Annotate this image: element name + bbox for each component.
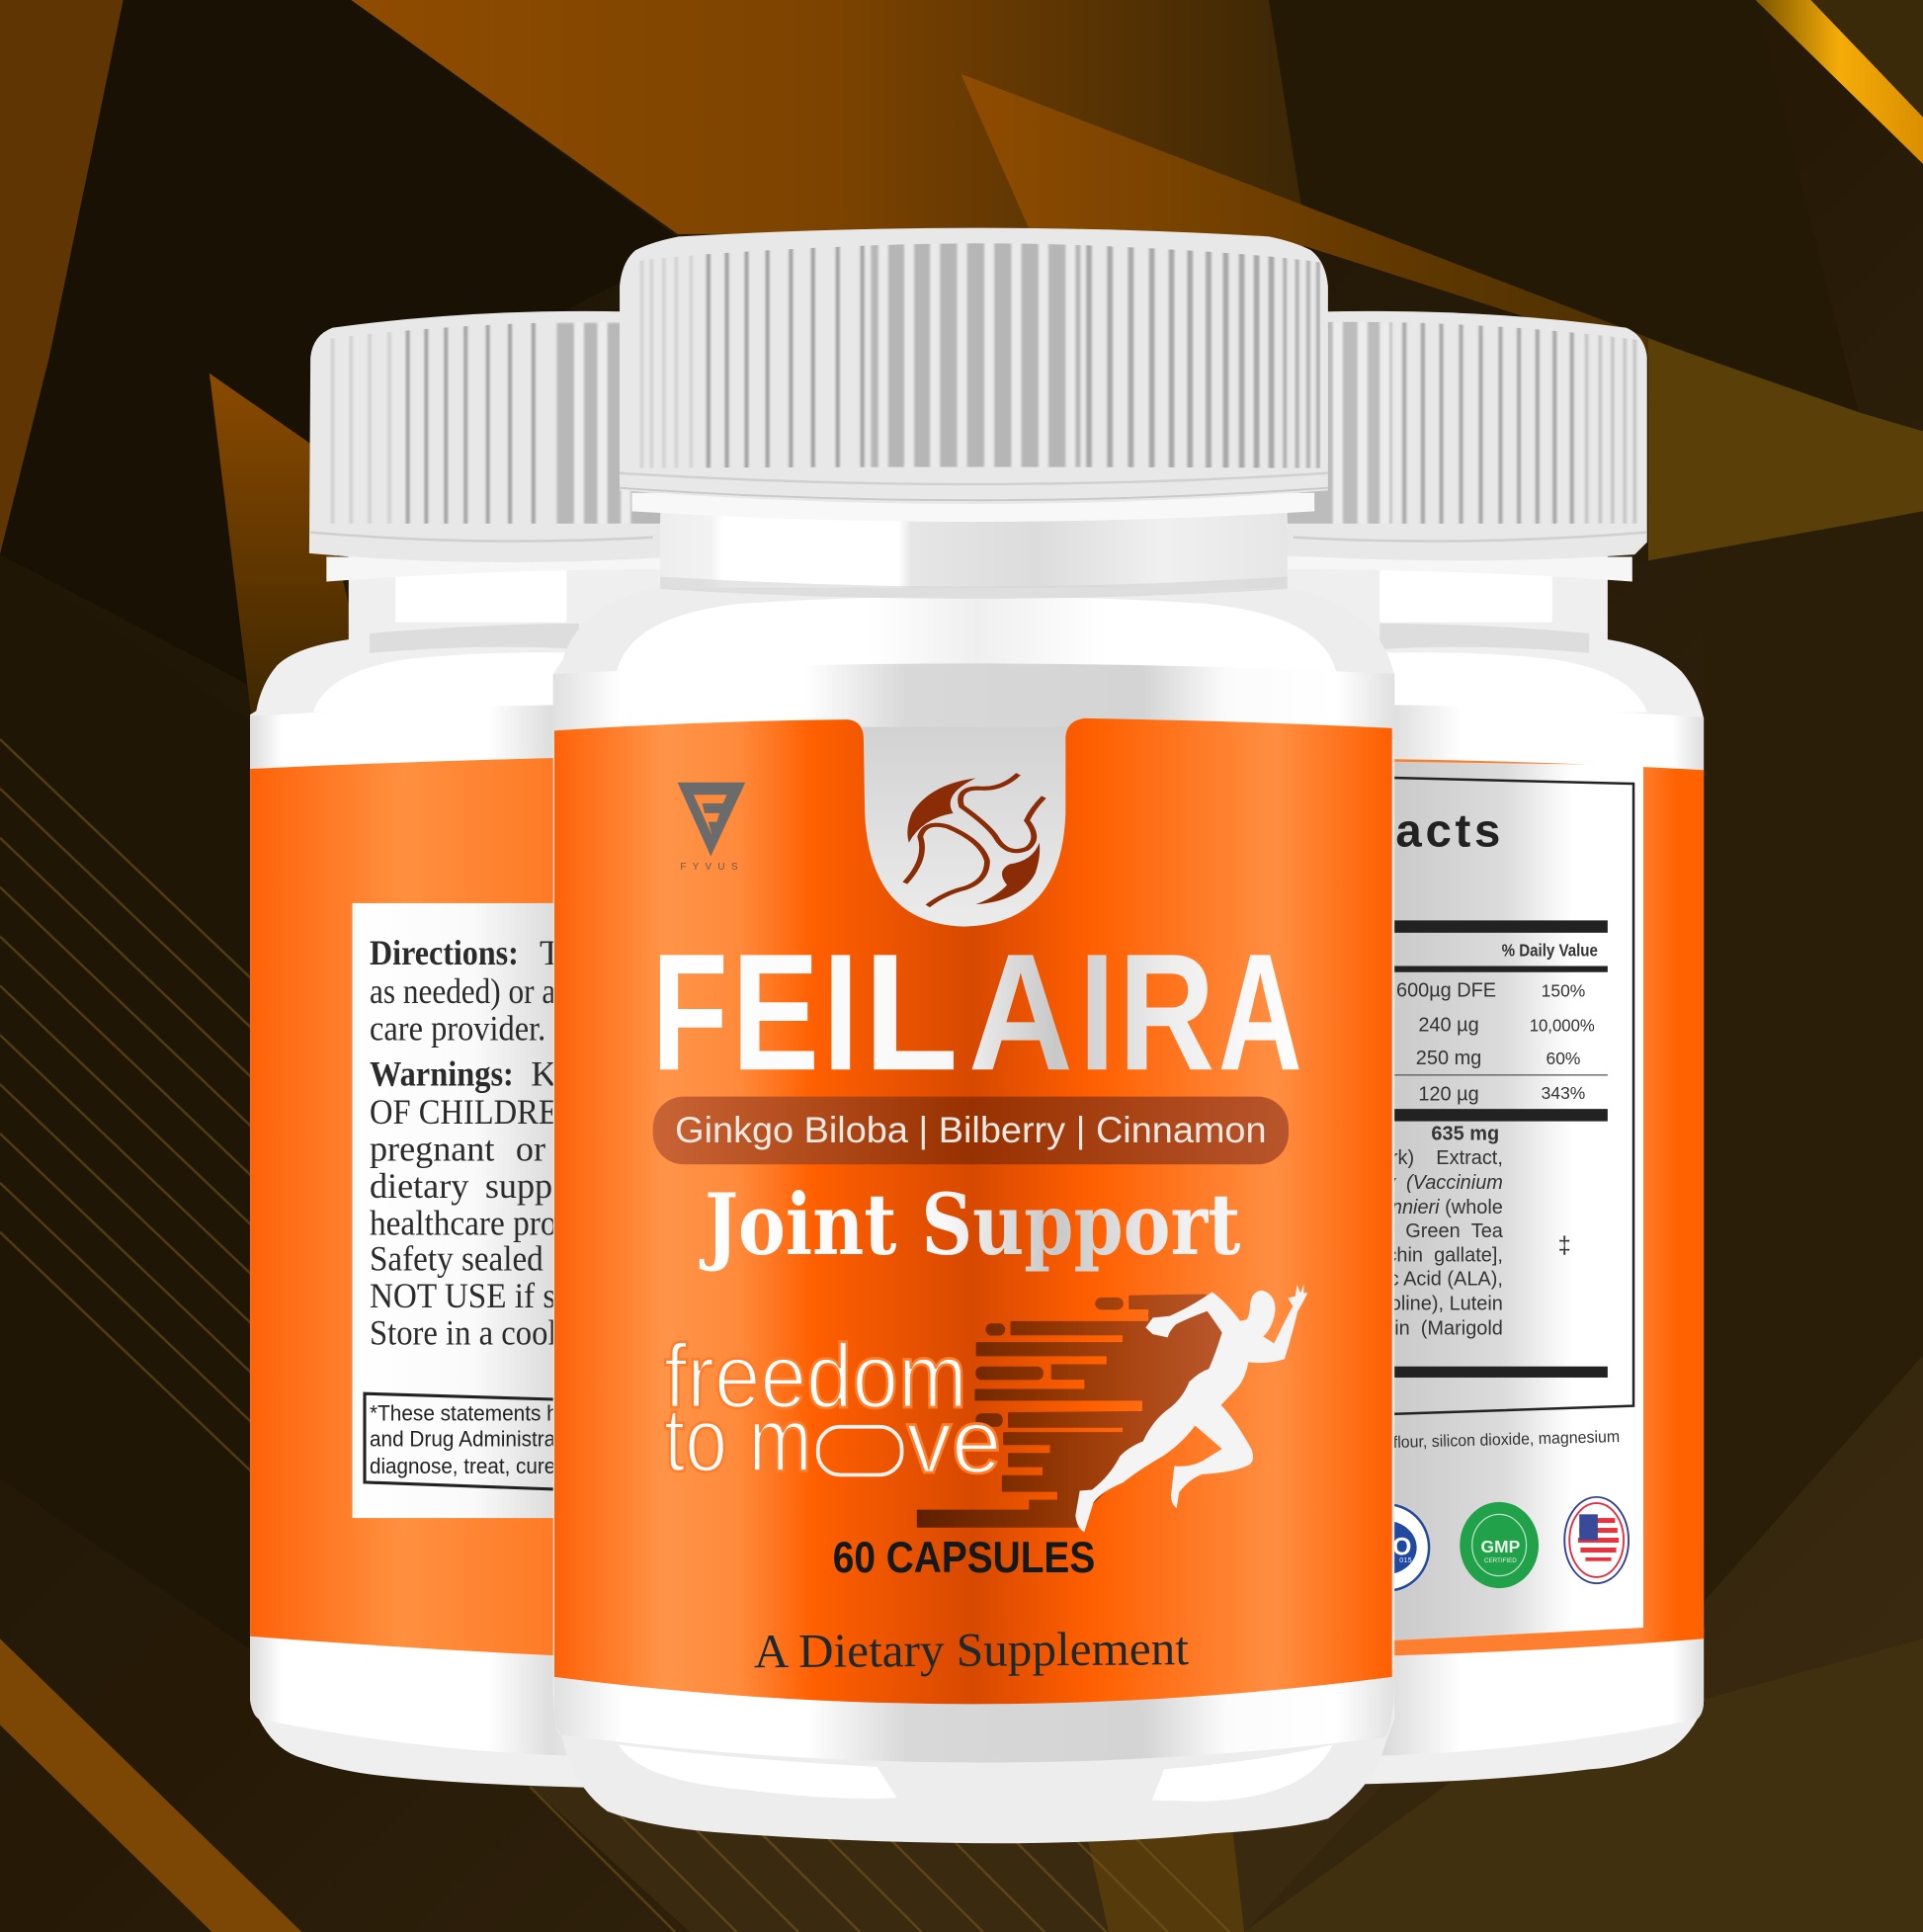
tagline: freedom to move: freedom xyxy=(664,1324,967,1427)
right bottle label xyxy=(1380,759,1704,1656)
brand logo: FYVUS: FYVUS xyxy=(680,862,744,873)
daily value table: 150% xyxy=(1542,981,1585,1001)
badge: GMP certified: CERTIFIED xyxy=(1484,1557,1517,1564)
tagline: freedom to move: to m xyxy=(664,1388,812,1491)
base highlight right xyxy=(1152,1744,1333,1802)
front collar xyxy=(632,493,1314,522)
right neck highlight xyxy=(1380,569,1552,623)
left band xyxy=(250,705,566,776)
front neck xyxy=(660,511,1288,588)
directions text: care provider. xyxy=(370,1008,545,1048)
disclaimer box: and Drug Administra xyxy=(370,1427,556,1452)
left base band xyxy=(250,1627,566,1756)
capsule count: 60 CAPSULES xyxy=(833,1532,1095,1582)
daily value table: 60% xyxy=(1547,1049,1580,1068)
directions text: NOT USE if s xyxy=(370,1276,555,1315)
proprietary blend text: c Acid (ALA), xyxy=(1389,1268,1503,1290)
badge: GMP certified xyxy=(1460,1502,1539,1588)
directions text: as needed) or a xyxy=(370,971,555,1011)
directions text: K xyxy=(531,1053,556,1093)
front bottle xyxy=(553,228,1394,1843)
right band xyxy=(1380,705,1704,776)
decorative stripes xyxy=(0,739,1229,1932)
product name: I xyxy=(1079,919,1115,1105)
daily value table: % Daily Value xyxy=(1502,941,1598,961)
facts rules xyxy=(1380,920,1608,1378)
icon: joint xyxy=(905,774,1044,906)
product name: E xyxy=(732,919,819,1105)
tagline: freedom to move xyxy=(664,1324,1002,1492)
directions text: healthcare pro xyxy=(370,1203,556,1242)
directions panel xyxy=(352,903,553,1518)
left shoulder groove xyxy=(370,624,579,653)
directions text: Store in a cool xyxy=(370,1312,556,1352)
proprietary blend text: nnieri (whole xyxy=(1391,1197,1503,1218)
daily value table: 343% xyxy=(1542,1083,1585,1103)
left neck highlight xyxy=(395,569,566,623)
front bottle body xyxy=(553,518,1394,1843)
product name xyxy=(651,919,1302,1105)
front shoulder groove xyxy=(660,577,1288,599)
left back bottle xyxy=(250,311,674,1789)
front shoulder highlight xyxy=(616,596,1337,674)
proprietary blend text: 635 mg xyxy=(1431,1123,1499,1144)
proprietary blend text: y (Vaccinium xyxy=(1383,1172,1503,1194)
ingredients pill: Ginkgo Biloba | Bilberry | Cinnamon xyxy=(675,1109,1267,1150)
proprietary blend text: oline), Lutein xyxy=(1390,1293,1503,1314)
badge: ISO certified: 015 xyxy=(1399,1555,1412,1564)
facts frame xyxy=(1380,778,1633,1414)
directions text: pregnant or r xyxy=(370,1129,579,1168)
directions text: dietary supple xyxy=(370,1166,578,1206)
facts heading: acts xyxy=(1395,805,1500,858)
headline: Joint Support: Joint Support xyxy=(699,1175,1240,1274)
runner silhouette xyxy=(1075,1284,1307,1532)
product name: A xyxy=(1218,919,1302,1105)
front base band xyxy=(554,1669,1394,1763)
proprietary blend text: ‡ xyxy=(1558,1233,1571,1259)
base highlight left xyxy=(619,1744,897,1799)
left shoulder highlight xyxy=(313,652,579,713)
runner speed graphic xyxy=(918,1284,1307,1532)
daily value table: 600µg DFE xyxy=(1396,980,1496,1002)
badge: GMP certified: GMP xyxy=(1481,1537,1521,1556)
product name: A xyxy=(968,919,1073,1105)
right bottle cap xyxy=(1275,311,1647,560)
badge: ISO certified: O xyxy=(1392,1533,1411,1560)
directions text: Directions: xyxy=(370,933,519,972)
right shoulder groove xyxy=(1380,624,1589,653)
left bottle body xyxy=(250,543,671,1789)
tagline: freedom to move: ve xyxy=(907,1389,1002,1492)
dietary supplement line: A Dietary Supplement xyxy=(754,1622,1190,1678)
daily value table xyxy=(1396,941,1598,1105)
right bottle body xyxy=(1275,543,1704,1786)
proprietary blend text: in (Marigold xyxy=(1394,1317,1503,1339)
directions text: T xyxy=(540,933,561,972)
proprietary blend text xyxy=(1383,1123,1571,1339)
disclaimer box: *These statements h xyxy=(370,1401,558,1426)
front bottle cap xyxy=(620,228,1328,504)
speed lines xyxy=(918,1295,1242,1527)
left bottle cap xyxy=(309,311,674,562)
badge: USA flag xyxy=(1564,1497,1629,1583)
product name: F xyxy=(651,919,728,1105)
ingredients pill xyxy=(653,1097,1289,1164)
daily value table: 120 µg xyxy=(1418,1083,1479,1105)
proprietary blend text: rk) Extract, xyxy=(1391,1147,1503,1169)
daily value table: 10,000% xyxy=(1530,1016,1595,1036)
supplement facts panel xyxy=(1394,761,1643,1640)
right back bottle xyxy=(1275,311,1704,1786)
front label xyxy=(554,718,1392,1704)
directions text xyxy=(370,940,553,1345)
product name: I xyxy=(823,919,859,1105)
product name: L xyxy=(864,919,959,1105)
daily value table: 240 µg xyxy=(1418,1015,1479,1037)
product name: R xyxy=(1119,919,1214,1105)
notch backing xyxy=(860,727,1069,930)
daily value table: 250 mg xyxy=(1416,1048,1481,1069)
right base band xyxy=(1380,1627,1704,1756)
right shoulder highlight xyxy=(1380,652,1647,713)
badge: ISO certified xyxy=(1394,1504,1431,1591)
directions text: Warnings: xyxy=(370,1053,514,1093)
proprietary blend text: Green Tea xyxy=(1405,1220,1504,1242)
brand logo: FYVUS xyxy=(678,783,745,873)
disclaimer box xyxy=(365,1393,566,1489)
proprietary blend text: chin gallate], xyxy=(1386,1245,1503,1267)
left bottle label xyxy=(250,758,566,1656)
directions text: Safety sealed xyxy=(370,1238,543,1278)
left collar xyxy=(326,557,671,581)
front shoulder band xyxy=(553,663,1394,739)
directions text: OF CHILDRE xyxy=(370,1092,558,1132)
other ingredients: flour, silicon dioxide, magnesium xyxy=(1393,1427,1620,1452)
disclaimer box: diagnose, treat, cure xyxy=(370,1454,555,1478)
right collar xyxy=(1275,557,1632,581)
